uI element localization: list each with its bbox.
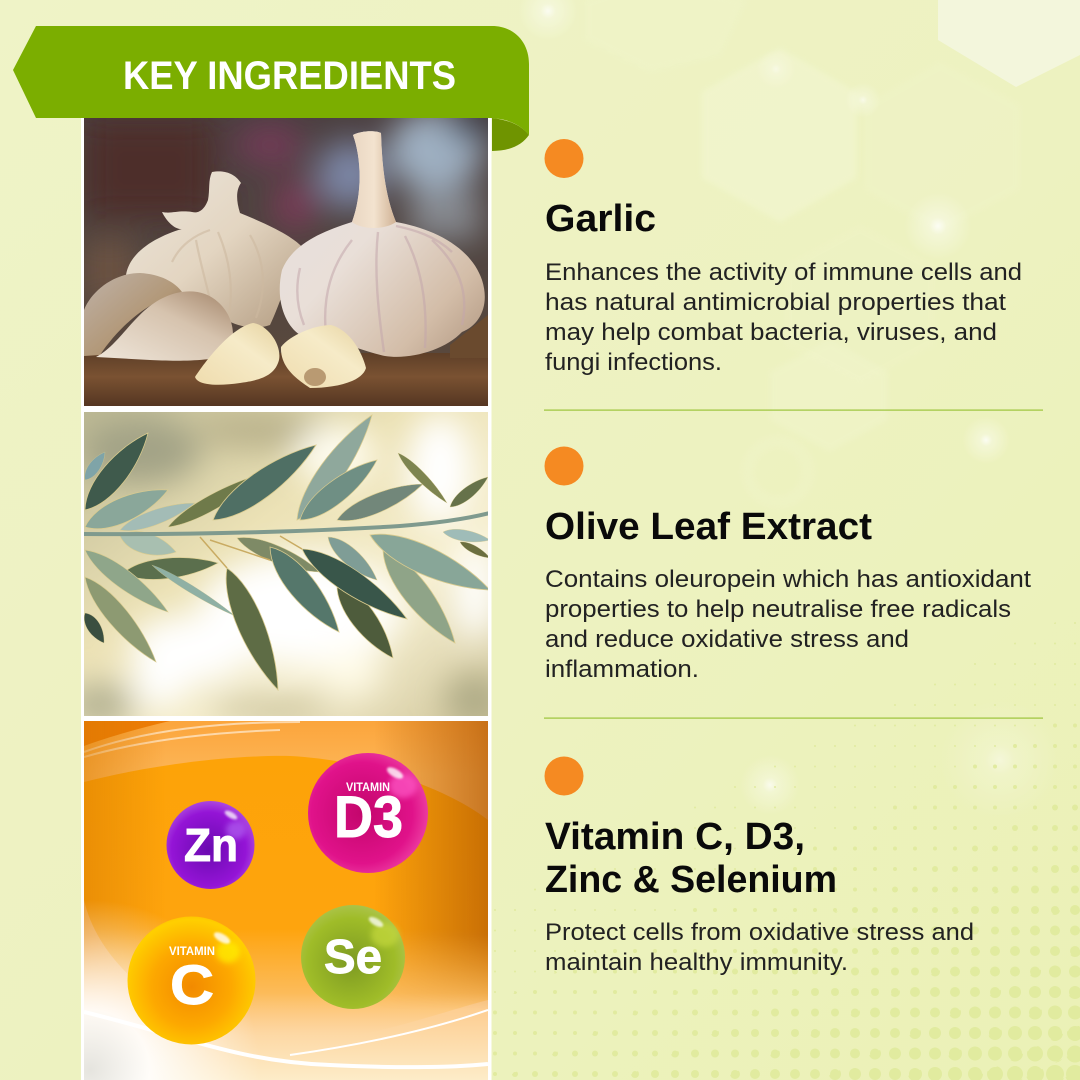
ingredient: vitamins, zinc and selenium: maintain healthy immunity. <box>545 949 848 976</box>
photo: olive leaves <box>84 412 488 716</box>
olive stem <box>84 513 490 568</box>
ingredient: garlic: may help combat bacteria, viruses, and <box>545 319 997 346</box>
vitamin C sphere <box>128 916 256 1044</box>
wooden board <box>84 353 488 406</box>
left garlic bulb <box>126 171 303 328</box>
ribbon banner: key ingredients: KEY INGREDIENTS <box>123 54 456 98</box>
vitamin D3 sphere: D3 <box>334 785 403 850</box>
vitamin D3 sphere <box>308 753 428 873</box>
ribbon banner: key ingredients <box>13 26 529 151</box>
ingredient: garlic: has natural antimicrobial properties that <box>545 289 1006 316</box>
right garlic bulb <box>280 131 485 357</box>
vitamin C sphere: C <box>170 953 214 1016</box>
selenium sphere <box>301 905 405 1009</box>
ingredient: vitamins, zinc and selenium: Zinc & Selenium <box>545 859 837 901</box>
zinc sphere <box>166 801 254 889</box>
photo: garlic <box>84 110 490 406</box>
selenium sphere: Se <box>324 931 382 984</box>
background: halftone dots <box>490 610 1080 1080</box>
background: hexagon pattern and glows <box>518 0 1080 820</box>
ingredient: vitamins, zinc and selenium: Vitamin C, D3, <box>545 816 805 858</box>
ingredient: olive leaf extract: Olive Leaf Extract <box>545 506 872 548</box>
photo: vitamins and minerals <box>84 721 488 1080</box>
vitamin C sphere: VITAMIN <box>169 946 215 958</box>
white photo frame <box>81 118 492 1080</box>
ingredient: olive leaf extract: inflammation. <box>545 656 699 683</box>
vitamin D3 sphere: VITAMIN <box>346 782 390 794</box>
ingredient: vitamins, zinc and selenium: Protect cells from oxidative stress and <box>545 919 974 946</box>
ingredient: olive leaf extract <box>544 446 1031 683</box>
ingredient: olive leaf extract: and reduce oxidative stress and <box>545 626 909 653</box>
zinc sphere: Zn <box>184 819 238 871</box>
peeled cloves <box>195 323 366 388</box>
ingredient: garlic: fungi infections. <box>545 349 722 376</box>
ingredient: olive leaf extract: Contains oleuropein which has antioxidant <box>545 566 1031 593</box>
leaves above the stem <box>84 414 488 531</box>
orange blob backdrop <box>84 756 488 1042</box>
ingredient: vitamins, zinc and selenium <box>544 756 974 976</box>
ingredient: olive leaf extract: properties to help neutralise free radicals <box>545 596 1011 623</box>
ingredient: garlic <box>544 139 1022 376</box>
ingredient: garlic: Garlic <box>545 198 656 240</box>
leaves below the stem <box>77 522 496 695</box>
back garlic clove <box>84 273 182 356</box>
front garlic clove <box>96 291 233 361</box>
ingredient: garlic: Enhances the activity of immune cells and <box>545 259 1022 286</box>
